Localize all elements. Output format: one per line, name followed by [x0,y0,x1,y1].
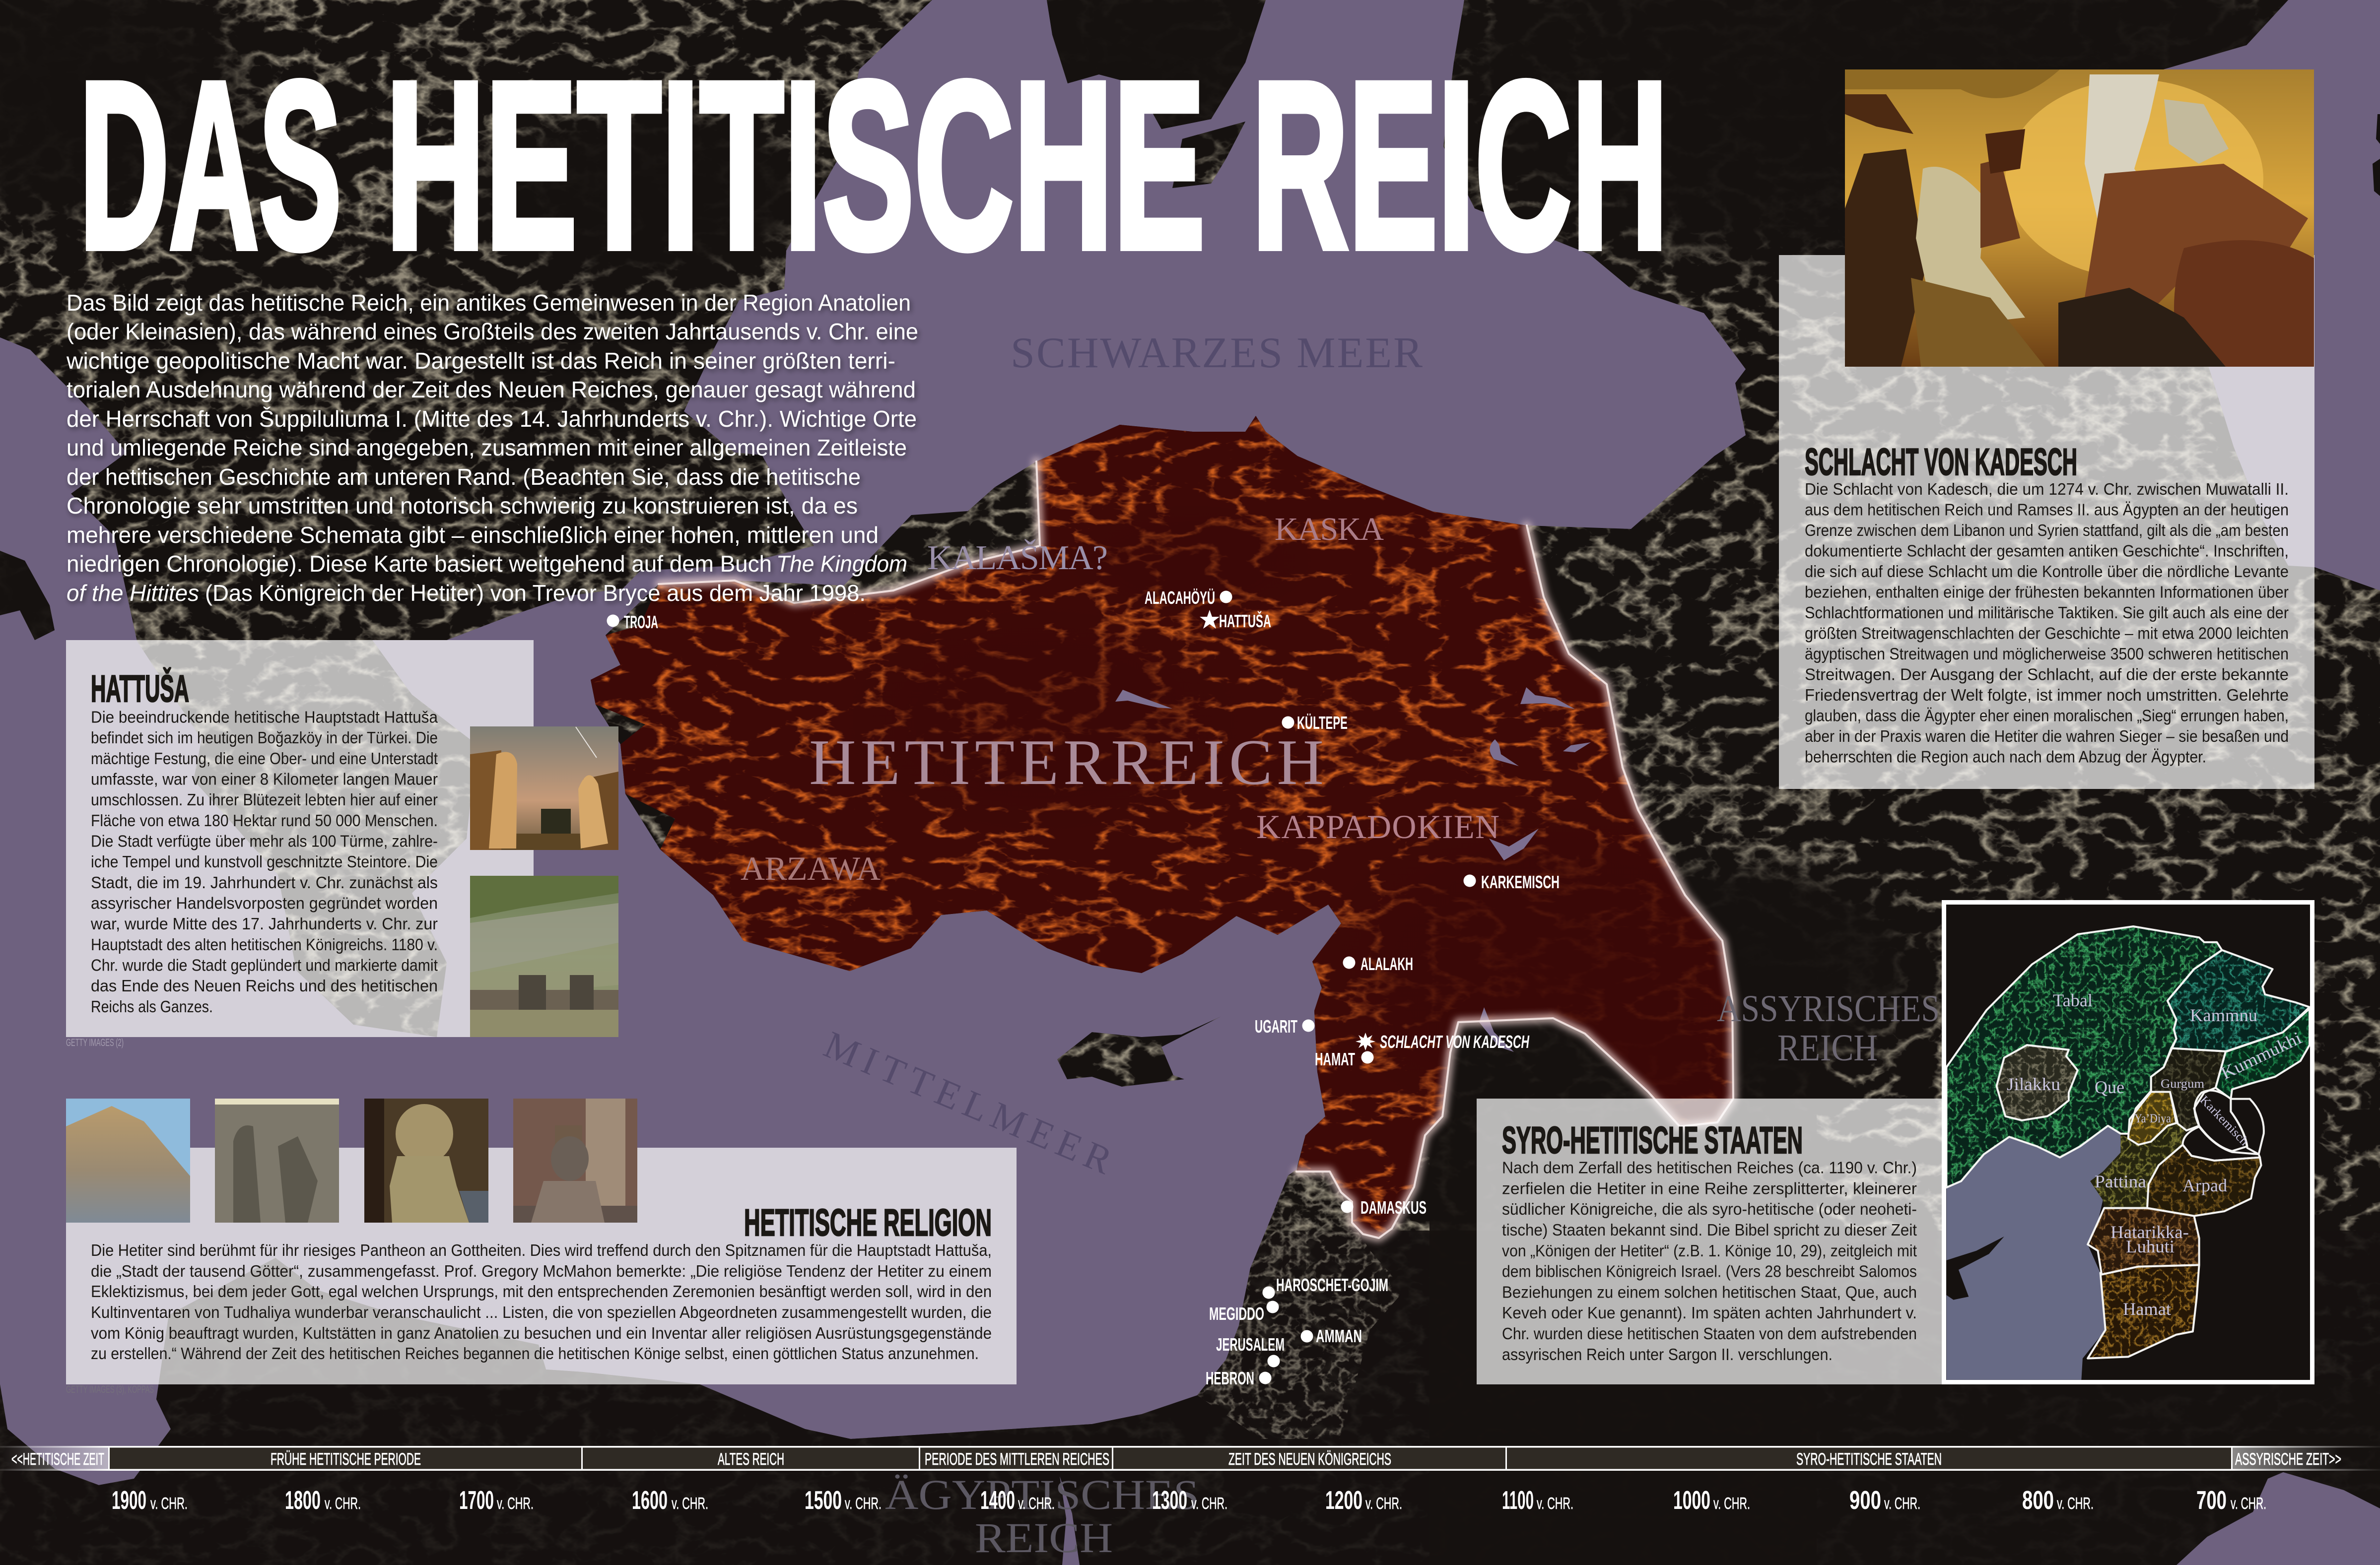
timeline year labels: v. CHR. [150,1494,188,1512]
city: Ugarit: UGARIT [1255,1016,1297,1037]
city: Alalakh [1343,954,1413,974]
body text: Kadesch: beherrschten die Region auch nach dem Abzug der Ägypter. [1805,747,2206,766]
body text: Kadesch: ägyptischen Streitwagen und möglicherweise 3500 schweren hetitischen [1805,645,2289,663]
timeline year labels: 1300 [1152,1486,1187,1515]
intro text block: Das Bild zeigt das hetitische Reich, ein antikes Gemeinwesen in der Region Anatolien [67,290,911,316]
timeline year labels: v. CHR. [1713,1494,1750,1512]
timeline year labels: 1500 [805,1486,842,1515]
body text: religion: Kultinventaren von Tudhaliya wunderbar veranschaulicht ... Listen, die von speziellen Abgeordneten zusammengestellt wurden, die [91,1303,992,1321]
photo: stone relief figures [215,1099,339,1223]
body text: religion: Eklektizismus, bei dem jeder Gott, egal welchen Ursprungs, mit den entsprechenden Zeremonien besänftigt werden soll, wird in den [91,1282,992,1301]
inset state names: Gurgum [2161,1077,2205,1091]
body text: Hattusa: Reichs als Ganzes. [91,997,213,1016]
city: Haroschet-Gojim [1263,1275,1388,1299]
intro text block: der Herrschaft von Šuppiluliuma I. (Mitte des 14. Jahrhunderts v. Chr.). Wichtige Orte [67,406,917,432]
body text: Kadesch: dokumentierte Schlacht der gesamten antiken Geschichte“. Inschriften, [1805,542,2289,560]
body text: Syro-Hittite: Nach dem Zerfall des hetitischen Reiches (ca. 1190 v. Chr.) [1502,1158,1917,1177]
capital: Hattusa with star [1200,610,1271,631]
inset state names: Luhuti [2126,1237,2175,1256]
body text: Syro-Hittite: von „Königen der Hetiter“ (z.B. 1. Könige 10, 29), zeitgleich mit [1502,1241,1917,1260]
body text: Kadesch: beziehen, enthalten einige der frühesten bekannten Informationen über [1805,583,2289,601]
panel background [66,640,534,1037]
battle marker: Schlacht von Kadesch: SCHLACHT VON KADESCH [1380,1032,1530,1052]
body text: religion: zu erstellen.“ Während der Zeit des hetitischen Reiches begannen die hetitischen Könige selbst, einen göttlichen Status anzunehmen. [91,1344,979,1363]
timeline period labels: ZEIT DES NEUEN KÖNIGREICHS [1228,1450,1391,1469]
timeline year labels: 1600 [632,1486,668,1515]
body text: Kadesch: Streitwagen. Der Ausgang der Schlacht, auf die der erste bekannte [1805,665,2289,684]
body text: Hattusa: war, wurde Mitte des 17. Jahrhunderts v. Chr. zur [90,914,438,933]
region label: Kalasma: KALAŠMA? [927,539,1108,577]
body text: Kadesch: die sich auf diese Schlacht um die Kontrolle über die nördliche Levante [1805,562,2289,581]
region label: Kappadokien: KAPPADOKIEN [1256,808,1499,846]
timeline year labels: 1000 [1673,1486,1710,1515]
photo: bearded king statue [513,1099,637,1223]
body text: Hattusa: befindet sich im heutigen Boğazköy in der Türkei. Die [91,728,438,747]
inset state names: Kummukhi [2218,1028,2305,1083]
body text: Kadesch: Friedensvertrag der Welt folgte, ist immer noch umstritten. Gelehrte [1805,686,2289,704]
body text: Hattusa [90,708,438,1016]
sea label: Schwarzes Meer: SCHWARZES MEER [1011,329,1423,377]
panel: Syro-Hittite states [1477,1099,1942,1384]
timeline year labels: 1900 [112,1486,146,1515]
inset frame [1944,902,2312,1382]
city: Kueltepe [1282,713,1348,733]
timeline period labels: FRÜHE HETITISCHE PERIODE [271,1450,421,1469]
timeline period labels: ALTES REICH [718,1450,784,1469]
body text: Hattusa: umfasste, war von einer 8 Kilometer langen Mauer [91,770,438,788]
body text: Hattusa: das Ende des Neuen Reichs und des hetitischen [91,977,438,995]
city: Haroschet-Gojim: HAROSCHET-GOJIM [1276,1275,1388,1295]
body text: Kadesch: glauben, dass die Ägypter eher einen moralischen „Sieg“ errungen haben, [1805,707,2289,724]
timeline year labels: v. CHR. [1018,1494,1055,1512]
intro text block [66,290,918,606]
timeline year labels: 900 [1849,1486,1881,1515]
city: Kueltepe: KÜLTEPE [1297,713,1348,733]
inset region fills [1946,926,2310,1359]
intro text block: (oder Kleinasien), das während eines Großteils des zweiten Jahrtausends v. Chr. eine [67,319,918,344]
photo: rock relief [66,1099,190,1223]
body text: Hattusa: umschlossen. Zu ihrer Blütezeit lebten hier auf einer [91,790,438,809]
body text: Hattusa: Hauptstadt des alten hetitischen Königreichs. 1180 v. [91,935,438,954]
inset state names: Ya’Diya [2134,1112,2171,1125]
glowing border [659,461,1733,1238]
timeline period labels: SYRO-HETITISCHE STAATEN [1796,1450,1942,1469]
body text: Hattusa: Die beeindruckende hetitische Hauptstadt Hattuša [91,708,438,726]
photo: colossal head statue [364,1099,488,1223]
photo: Sphinx gate at night [470,726,618,850]
lakes and rivers [1115,687,1591,1052]
region label: Kaska: KASKA [1275,511,1384,547]
body text: Kadesch: Schlachtformationen und militärische Taktiken. Sie gilt auch als eine der [1805,603,2289,622]
region label: Assyrisches Reich: ASSYRISCHES [1717,988,1940,1030]
body text: Syro-Hittite: zerfielen die Hetiter in eine Reihe zersplitterter, kleinerer [1502,1179,1917,1198]
capital: Hattusa with star: HATTUŠA [1219,610,1271,631]
region label: Aegyptisches Reich [885,1471,1199,1562]
heading: Syro-Hetitische Staaten: SYRO-HETITISCHE STAATEN [1502,1119,1803,1162]
heading: Hetitische Religion: HETITISCHE RELIGION [744,1202,992,1244]
title: HETITISCHE [386,32,1205,298]
body text: Hattusa: Stadt, die im 19. Jahrhundert v. Chr. zunächst als [91,873,438,892]
city: Hebron: HEBRON [1206,1368,1254,1388]
body text: Syro-Hittite [1502,1158,1917,1364]
city: Karkemisch [1463,872,1560,892]
timeline year labels: v. CHR. [2057,1494,2094,1512]
timeline year labels: 1200 [1325,1486,1362,1515]
inset state names: Jilakku [2007,1074,2060,1094]
inset state names: Karkemisch [2197,1093,2251,1149]
body text: Kadesch: aber in der Praxis waren die Hetiter die wahren Sieger – sie besaßen und [1805,727,2289,745]
timeline year labels: v. CHR. [325,1494,361,1512]
inset state names: Hamat [2123,1299,2171,1319]
body text: Syro-Hittite: assyrischen Reich unter Sargon II. verschlungen. [1502,1345,1833,1364]
Hittite empire territory [546,397,1822,1290]
timeline year labels: 1700 [459,1486,494,1515]
title: DAS [79,32,341,298]
intro text block: (Das Königreich der Hetiter) von Trevor Bryce aus dem Jahr 1998. [205,580,866,606]
panel: Hittite religion [66,1099,1017,1384]
body text: Hattusa: mächtige Festung, die eine Ober- und eine Unterstadt [91,749,438,768]
body text: Kadesch: Die Schlacht von Kadesch, die um 1274 v. Chr. zwischen Muwatalli II. [1805,480,2289,498]
body text: Hattusa: iche Tempel und kunstvoll geschnitzte Steintore. Die [91,852,438,871]
timeline bar [0,1446,2380,1471]
title: REICH [1252,32,1668,298]
body text: religion: die „Stadt der tausend Götter“, zusammengefasst. Prof. Gregory McMahon bemerkte: „Die religiöse Tendenz der Hetiter zu einem [91,1262,992,1280]
city markers and names [607,587,1560,1388]
timeline year labels: v. CHR. [1365,1494,1402,1512]
panel: Hattusa [66,640,618,1037]
timeline period labels: <<HETITISCHE ZEIT [11,1450,104,1469]
heading: Schlacht von Kadesch: SCHLACHT VON KADESCH [1805,441,2077,483]
body text: Syro-Hittite: südlicher Königreiche, die als syro-hetitische (oder neoheti- [1502,1200,1917,1218]
city: Jerusalem [1216,1334,1285,1368]
timeline year labels: v. CHR. [2231,1494,2266,1512]
intro text block: wichtige geopolitische Macht war. Dargestellt ist das Reich in seiner größten terri- [66,348,895,374]
body text: Hattusa: Chr. wurde die Stadt geplündert und markierte damit [91,956,438,975]
body text: religion: Die Hetiter sind berühmt für ihr riesiges Pantheon an Gottheiten. Dies wird treffend durch den Spitznamen für die Hauptstadt Hattuša, [91,1241,992,1259]
empire relief [546,397,1822,1290]
terrain: Levant coast [1197,1172,1405,1439]
city: Troja [607,612,658,632]
region label: Assyrisches Reich [1717,988,1940,1069]
Persian Gulf [2176,1472,2380,1565]
timeline period labels [11,1450,2341,1469]
intro text block: und umliegende Reiche sind angegeben, zusammen mit einer allgemeinen Zeitleiste [67,435,907,460]
body text: Kadesch: aus dem hetitischen Reich und Ramses II. aus Ägypten an der heutigen [1805,500,2289,519]
Caspian details [2373,114,2380,196]
timeline year labels: 700 [2196,1486,2227,1515]
Red Sea arm [1060,1476,1080,1565]
panel background [1477,1099,1942,1384]
intro text block: der hetitischen Geschichte am unteren Rand. (Beachten Sie, dass die hetitische [67,464,861,490]
city: Alacahoeyue: ALACAHÖYÜ [1145,587,1215,608]
inset state names: Pattina [2095,1172,2146,1191]
inset state names: Tabal [2053,990,2093,1010]
battle marker: Schlacht von Kadesch [1356,1032,1530,1052]
painting: battle scene [1845,69,2314,367]
inset map: Syro-Hittite states [1944,902,2312,1382]
region label: Arzawa: ARZAWA [741,849,881,887]
heading: Hattusa: HATTUŠA [91,668,189,710]
body text: Hattusa: assyrischer Handelsvorposten gegründet worden [91,894,438,912]
body text: Hattusa: Die Stadt verfügte über mehr als 100 Türme, zahlre- [91,832,438,850]
body text: Syro-Hittite: Chr. wurden diese hetitischen Staaten von dem aufstrebenden [1502,1324,1917,1343]
city: Jerusalem: JERUSALEM [1216,1334,1285,1355]
inset Cyprus [1946,1237,2004,1300]
body text: Syro-Hittite: Keveh oder Kue genannt). Im späten achten Jahrhundert v. [1502,1304,1917,1322]
region label: Assyrisches Reich: REICH [1777,1027,1878,1069]
timeline year labels: 1400 [980,1486,1015,1515]
inset state names: Arpad [2182,1175,2227,1195]
intro text block: niedrigen Chronologie). Diese Karte basiert weitgehend auf dem Buch [67,551,772,577]
credit: Getty Images 3, Koppas: GETTY IMAGES (3), KOPPAS [66,1384,154,1395]
city: Troja: TROJA [624,612,658,632]
city: Amman [1300,1326,1362,1346]
intro text block: torialen Ausdehnung während der Zeit des Neuen Reiches, genauer gesagt während [67,377,916,402]
timeline period labels: PERIODE DES MITTLEREN REICHES [925,1450,1109,1469]
timeline year labels: v. CHR. [1884,1494,1920,1512]
timeline year labels: 1800 [285,1486,321,1515]
inset relief [1946,926,2310,1359]
city: Hamat: HAMAT [1315,1049,1355,1069]
region label: Aegyptisches Reich: REICH [975,1514,1113,1562]
panel background [66,1148,1017,1384]
photo: ruins of Hattusa [470,876,618,1037]
inset state names: Que [2095,1077,2124,1097]
body text: religion: vom König beauftragt wurden, Kultstätten in ganz Anatolien zu besuchen und ein Inventar aller religiösen Ausrüstungsgegenstände [91,1324,992,1342]
body text: Syro-Hittite: dem biblischen Königreich Israel. (Vers 28 beschreibt Salomos [1502,1262,1917,1280]
intro text block: Chronologie sehr umstritten und notorisch schwierig zu konstruieren ist, da es [67,493,858,519]
panel: Battle of Kadesh [1779,69,2314,789]
region label: Hetiterreich: HETITERREICH [809,726,1324,798]
inset state names: Kammnu [2190,1005,2257,1025]
region label: Aegyptisches Reich: ÄGYPTISCHES [885,1471,1199,1518]
body text: Kadesch: größten Streitwagenschlachten der Geschichte – mit etwa 2000 leichten [1805,624,2289,642]
city: Karkemisch: KARKEMISCH [1481,872,1560,892]
city: Megiddo: MEGIDDO [1209,1304,1264,1324]
body text: Syro-Hittite: tische) Staaten bekannt sind. Die Bibel spricht zu dieser Zeit [1502,1221,1917,1239]
city: Damaskus [1341,1197,1427,1218]
body text: Kadesch [1805,480,2289,766]
sea label: Mittelmeer: MITTELMEER [818,1023,1118,1182]
timeline year labels: 1100 [1502,1486,1534,1515]
timeline year labels: v. CHR. [497,1494,534,1512]
panel background [1779,255,2314,789]
body text: Hattusa: Fläche von etwa 180 Hektar rund 50 000 Menschen. [91,811,438,830]
body text: religion [91,1241,992,1363]
empire base [591,416,1733,1238]
city: Damaskus: DAMASKUS [1360,1197,1427,1218]
timeline year labels [112,1486,2266,1515]
intro text block: mehrere verschiedene Schemata gibt – einschließlich einer hohen, mittleren und [67,522,879,548]
timeline year labels: 800 [2022,1486,2054,1515]
timeline [0,1446,2380,1515]
intro text block: of the Hittites [67,580,199,606]
timeline year labels: v. CHR. [1537,1494,1573,1512]
inset state names [2007,990,2305,1319]
intro text block: The Kingdom [776,551,907,577]
credit: Getty Images 2: GETTY IMAGES (2) [66,1037,124,1048]
body text: Kadesch: Grenze zwischen dem Libanon und Syrien stattfand, gilt als die „am besten [1805,521,2289,539]
timeline year labels: v. CHR. [672,1494,708,1512]
city: Alalakh: ALALAKH [1360,954,1413,974]
inset sea [1946,1126,2120,1380]
timeline year labels: v. CHR. [845,1494,882,1512]
body text: Syro-Hittite: Beziehungen zu einem solchen hetitischen Staat, Que, auch [1502,1283,1917,1301]
region labels on the map [741,329,1940,1562]
inset state names: Hatarikka- [2110,1222,2189,1242]
city: Amman: AMMAN [1316,1326,1362,1346]
inset state borders [1946,926,2310,1359]
timeline year labels: v. CHR. [1191,1494,1227,1512]
